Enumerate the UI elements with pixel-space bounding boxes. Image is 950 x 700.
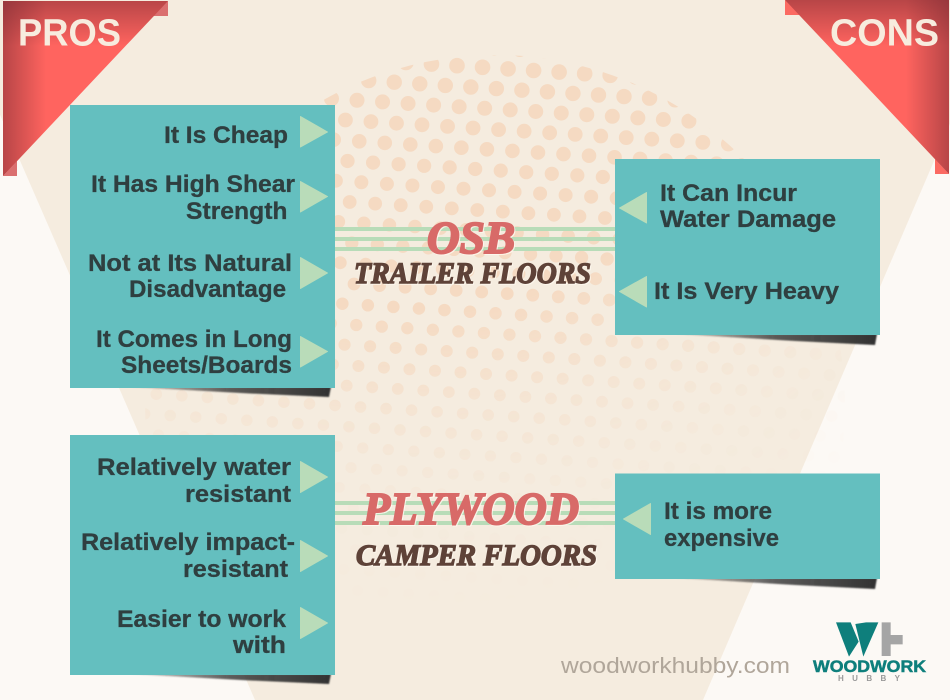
arrows pointing left xyxy=(620,192,646,307)
ribbon: pros xyxy=(3,1,168,176)
list of OSB pros xyxy=(88,122,295,379)
list of OSB pros: Sheets/Boards xyxy=(121,352,292,379)
panel: OSB cons xyxy=(615,159,880,345)
list of plywood pros: resistant xyxy=(185,481,291,508)
list of plywood pros: Relatively impact- xyxy=(81,529,295,556)
list of plywood cons: It is more xyxy=(664,498,772,525)
list of OSB pros: It Comes in Long xyxy=(96,326,292,353)
list of OSB pros: It Is Cheap xyxy=(164,122,288,149)
list of OSB cons: It Is Very Heavy xyxy=(654,278,839,305)
arrow pointing left xyxy=(624,504,650,534)
website credit: woodworkhubby.com xyxy=(560,653,790,678)
list of OSB cons: Water Damage xyxy=(660,206,836,233)
label: cons: CONS xyxy=(830,12,939,54)
connector stripes: plywood xyxy=(335,501,615,525)
list of OSB cons xyxy=(654,180,839,305)
panel: plywood pros xyxy=(70,435,335,684)
panel: plywood cons xyxy=(615,474,880,589)
list of plywood pros: Relatively water xyxy=(97,454,291,481)
list of plywood cons: expensive xyxy=(664,525,779,552)
heading: plywood: PLYWOOD xyxy=(362,483,579,534)
list of plywood pros: with xyxy=(232,632,286,659)
list of OSB pros: Not at Its Natural xyxy=(88,250,292,277)
list of plywood pros: Easier to work xyxy=(117,606,286,633)
subheading: trailer floors: TRAILER FLOORS xyxy=(354,257,591,290)
connector stripes: OSB xyxy=(335,227,615,251)
list of plywood pros: resistant xyxy=(183,556,288,583)
label: pros: PROS xyxy=(18,12,121,54)
logo: woodwork hubby: WOODWORK xyxy=(813,658,926,676)
list of OSB pros: It Has High Shear xyxy=(91,171,295,198)
arrows pointing right xyxy=(300,462,328,638)
logo: woodwork hubby xyxy=(813,622,926,683)
list of plywood pros xyxy=(81,454,295,659)
list of OSB cons: It Can Incur xyxy=(660,180,797,207)
subheading: camper floors: CAMPER FLOORS xyxy=(356,539,597,572)
logo: woodwork hubby: HUBBY xyxy=(838,674,901,683)
heading: OSB: OSB xyxy=(427,213,515,263)
list of OSB pros: Disadvantage xyxy=(129,276,286,303)
list of OSB pros: Strength xyxy=(186,198,288,225)
ribbon: cons xyxy=(785,0,949,174)
arrows pointing right xyxy=(300,116,328,367)
panel: OSB pros xyxy=(70,105,335,397)
halftone dot pattern xyxy=(150,55,745,454)
list of plywood cons xyxy=(664,498,779,552)
